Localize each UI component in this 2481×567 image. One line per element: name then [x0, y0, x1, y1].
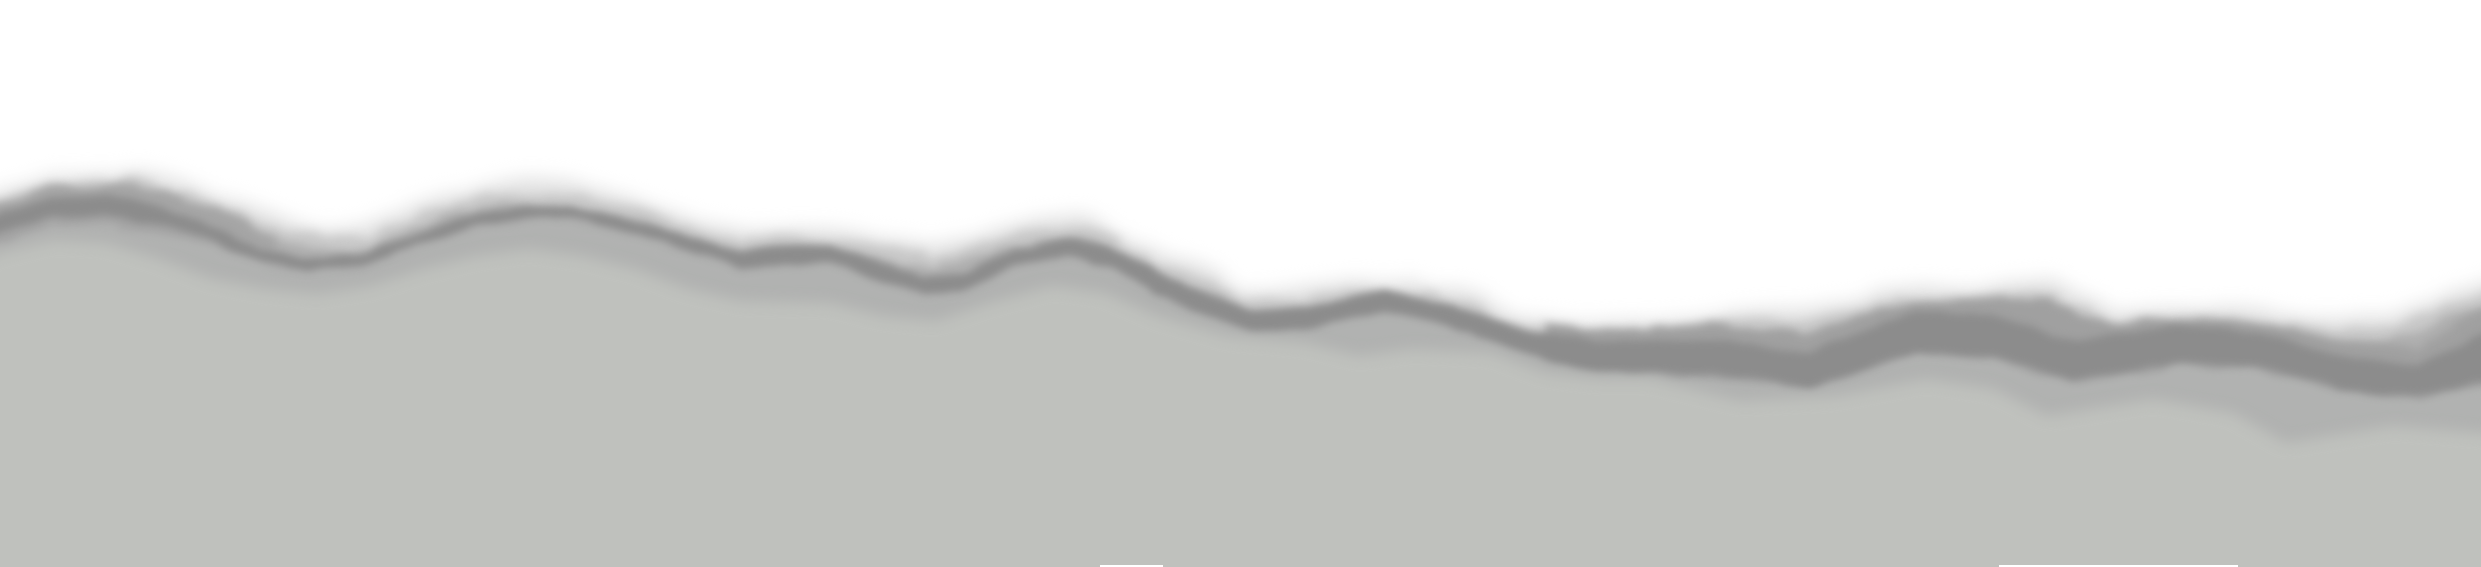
ridge: pale underside of band	[0, 219, 2481, 567]
foreground: solid land at the bottom	[0, 470, 2481, 567]
ridge: dark crest line	[0, 195, 2481, 397]
ridge: soft outer haze	[0, 171, 2481, 553]
ridge: mid-dark right mass	[1545, 295, 2481, 410]
ridge: mid grey band	[0, 193, 2481, 567]
bottom edge notches	[1100, 565, 2238, 567]
ridge: light grey fringe	[0, 181, 2481, 563]
ridge: mid-dark left shoulder	[0, 184, 275, 264]
foreground: flat grey land	[0, 240, 2481, 567]
